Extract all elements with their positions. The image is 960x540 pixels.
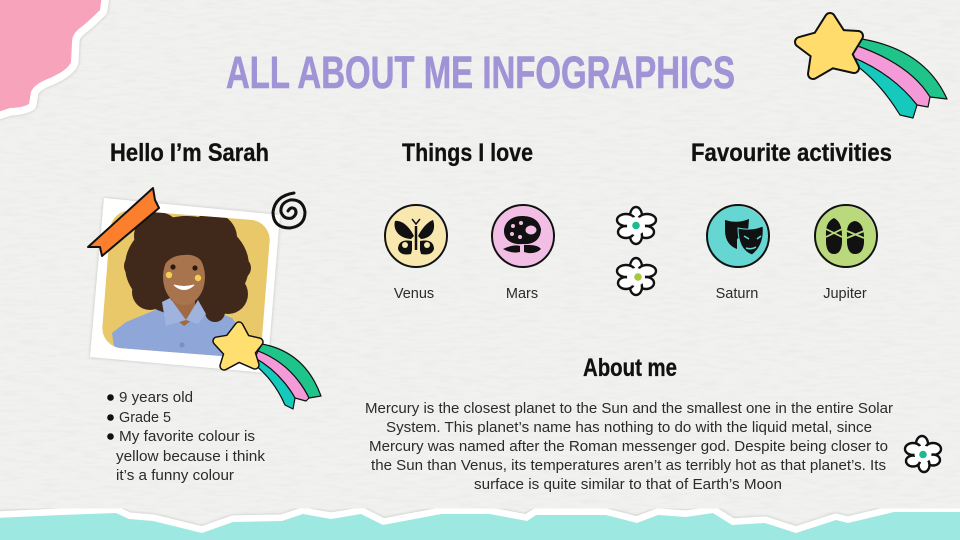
polaroid frame	[90, 198, 280, 373]
heading: About me: About me	[583, 354, 677, 382]
icon: Jupiter ballet shoes	[814, 205, 877, 268]
label: Venus: Venus	[394, 286, 434, 302]
flower 3	[905, 436, 941, 472]
icon: Saturn theatre masks	[706, 205, 769, 268]
bullet list: it’s a funny colour	[116, 468, 234, 484]
polaroid photo	[88, 196, 282, 374]
flower 1	[617, 207, 656, 244]
icon: Mars palette	[491, 205, 554, 268]
title: ALL ABOUT ME INFOGRAPHICS	[226, 47, 735, 98]
icon: Venus butterfly	[384, 205, 447, 268]
bullet list	[107, 390, 266, 484]
bullet list: Grade 5	[119, 410, 171, 426]
torn pink corner	[0, 0, 102, 113]
label: Saturn: Saturn	[716, 286, 758, 302]
heading: Things I love: Things I love	[402, 139, 533, 167]
about me paragraph: Mercury is the closest planet to the Sun and the smallest one in the entire Solar	[365, 401, 893, 417]
label: Jupiter: Jupiter	[823, 286, 867, 302]
tape	[88, 188, 159, 256]
portrait photo	[102, 210, 270, 356]
bullet list: yellow because i think	[116, 449, 266, 465]
shooting star on photo	[217, 326, 321, 409]
bullet list: My favorite colour is	[119, 429, 255, 445]
label: Mars: Mars	[506, 286, 538, 302]
torn teal bottom strip	[0, 512, 960, 540]
about me paragraph: the Sun than Venus, its temperatures aren’t as terribly hot as that planet’s. Its	[371, 458, 886, 474]
about me paragraph: surface is quite similar to that of Earth’s Moon	[474, 477, 782, 493]
about me paragraph: Mercury was named after the Roman messenger god. Despite being closer to	[369, 439, 888, 455]
flower 2	[617, 258, 656, 295]
heading: Favourite activities: Favourite activities	[691, 139, 892, 167]
heading: Hello I'm Sarah: Hello I’m Sarah	[110, 139, 269, 167]
about me paragraph: System. This planet’s name has nothing to do with the liquid metal, since	[386, 420, 872, 436]
bullet list: 9 years old	[119, 390, 193, 406]
about me paragraph	[365, 401, 893, 493]
spiral doodle	[273, 193, 305, 228]
shooting star top right	[800, 18, 947, 118]
